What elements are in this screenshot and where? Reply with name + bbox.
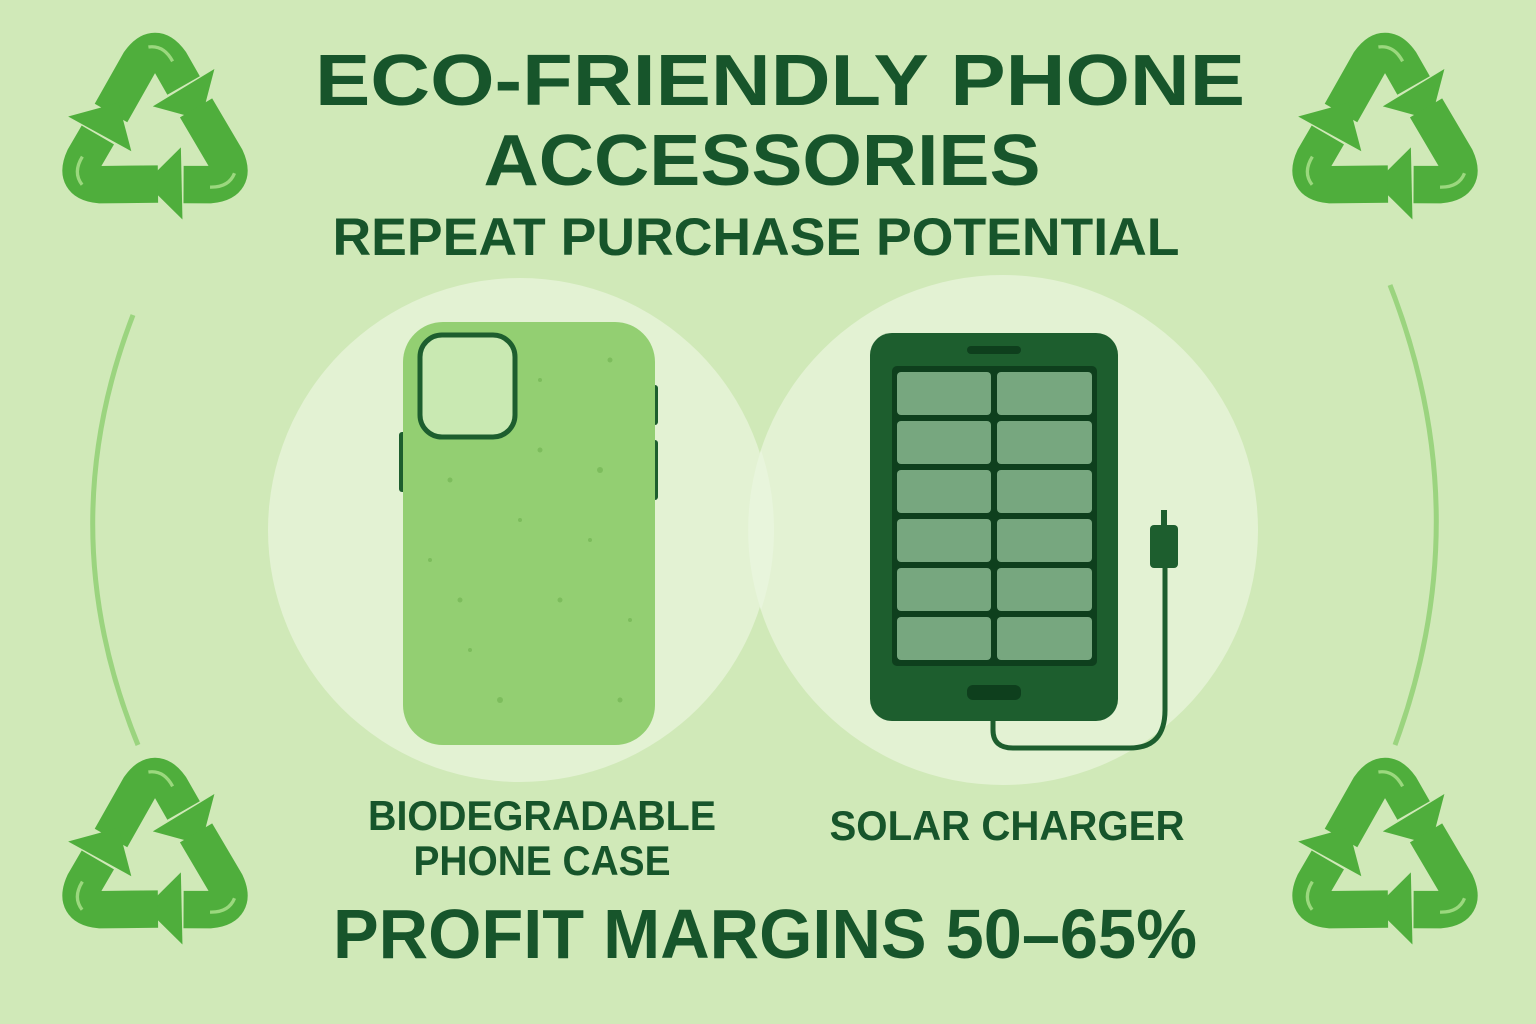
title: ACCESSORIES <box>484 121 1040 201</box>
title <box>315 41 1245 201</box>
icon: biodegradable phone case <box>399 322 658 745</box>
left arc <box>93 315 138 745</box>
right arc <box>1390 285 1436 745</box>
icon: solar charger <box>870 333 1178 748</box>
title: ECO-FRIENDLY PHONE <box>315 41 1245 121</box>
subtitle: REPEAT PURCHASE POTENTIAL <box>332 208 1180 267</box>
venn circles <box>268 275 1258 785</box>
icon: recycle bottom-left <box>49 772 253 956</box>
icon: recycle bottom-right <box>1279 772 1483 956</box>
label: biodegradable phone case <box>368 792 716 884</box>
label: biodegradable phone case: PHONE CASE <box>414 837 670 884</box>
icon: recycle top-right <box>1279 47 1483 231</box>
label: solar charger: SOLAR CHARGER <box>830 802 1184 849</box>
label: biodegradable phone case: BIODEGRADABLE <box>368 792 716 839</box>
icon: recycle top-left <box>49 47 253 231</box>
profit margins: PROFIT MARGINS 50–65% <box>333 895 1197 973</box>
